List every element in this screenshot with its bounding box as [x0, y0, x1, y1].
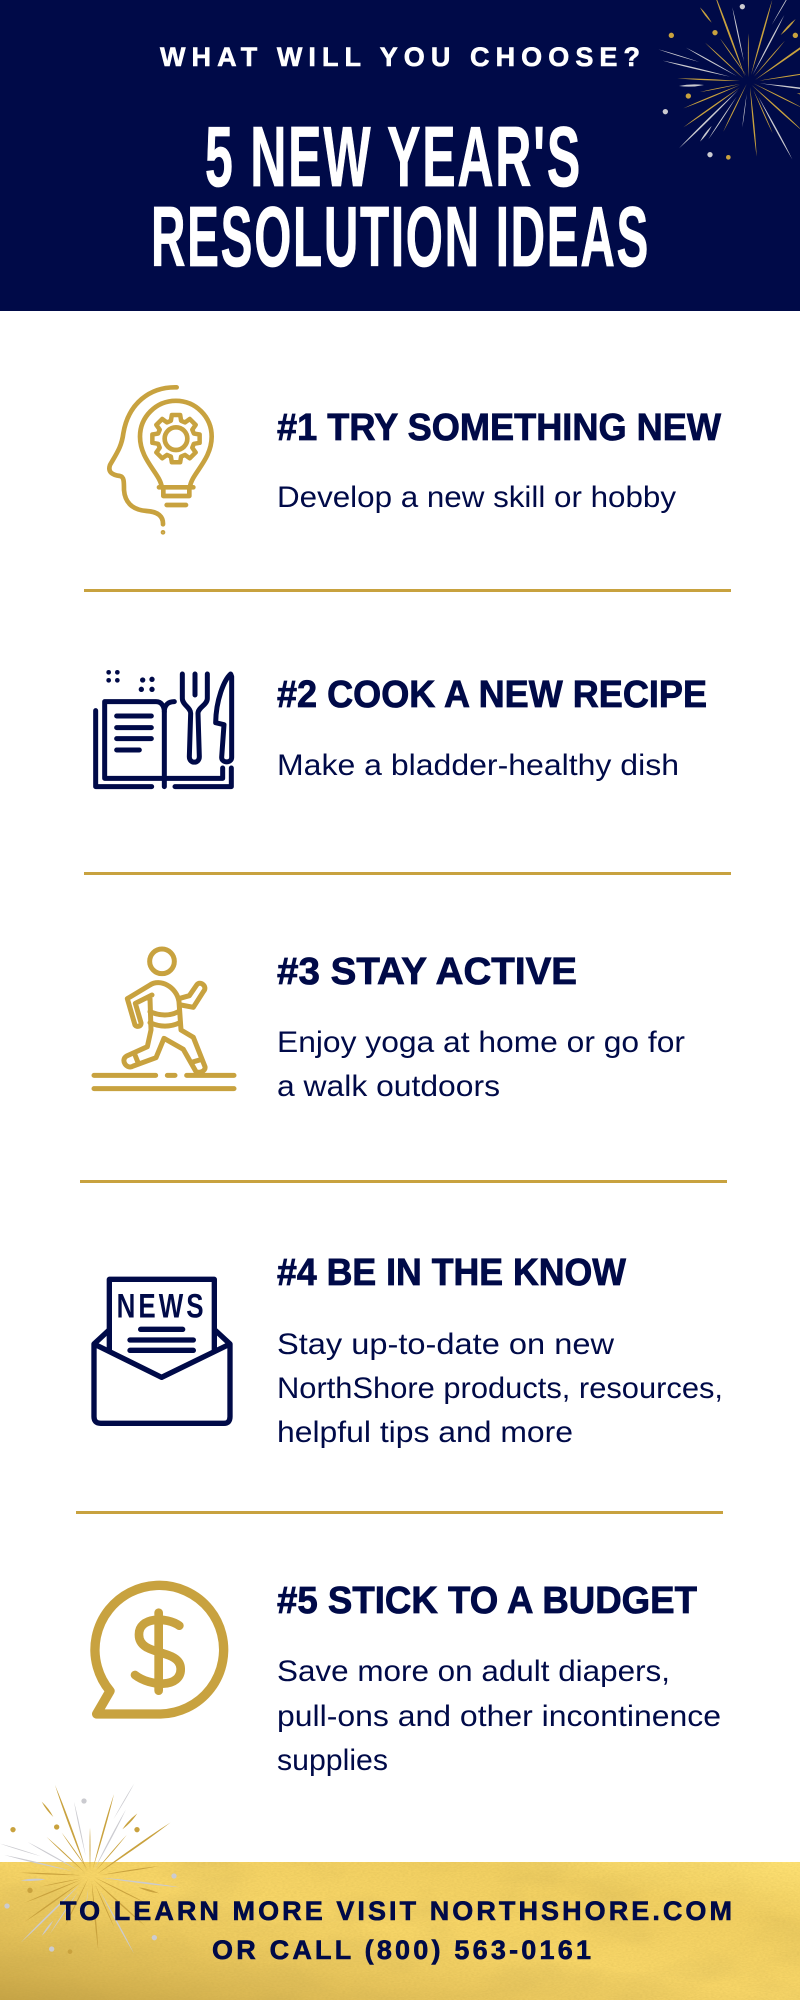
eyebrow heading: WHAT WILL YOU CHOOSE? [160, 42, 640, 72]
description: supplies [277, 1744, 388, 1777]
panel: resolution 5 [95, 1580, 721, 1777]
panel: resolution 1 [109, 387, 721, 533]
firework: bottom left [0, 1783, 180, 1954]
footer panel [0, 1783, 800, 2000]
description: Stay up-to-date on new [277, 1328, 614, 1361]
description [277, 1328, 723, 1449]
description [277, 1026, 685, 1103]
title [151, 110, 650, 285]
panel: resolution 4 [94, 1252, 723, 1449]
icon: head with light bulb gear [109, 387, 212, 533]
description: Develop a new skill or hobby [277, 481, 676, 514]
header background [0, 0, 800, 311]
icon: dollar speech bubble [95, 1585, 224, 1714]
divider 4 [76, 1511, 723, 1514]
heading: #2 COOK A NEW RECIPE [277, 674, 707, 716]
description: Save more on adult diapers, [277, 1655, 670, 1688]
panel: resolution 2 [96, 670, 707, 789]
icon: newsletter envelope [94, 1279, 230, 1423]
gold foil background [0, 1862, 800, 2000]
heading: #4 BE IN THE KNOW [277, 1252, 626, 1294]
panel: resolution 3 [94, 949, 685, 1103]
header panel [0, 0, 800, 311]
description: helpful tips and more [277, 1416, 573, 1449]
description: pull-ons and other incontinence [277, 1700, 721, 1733]
icon: recipe book with fork and knife [96, 670, 232, 789]
call to action [60, 1896, 732, 1965]
call to action: OR CALL (800) 563-0161 [212, 1935, 591, 1965]
description: Enjoy yoga at home or go for [277, 1026, 685, 1059]
description: a walk outdoors [277, 1070, 500, 1103]
divider 1 [84, 589, 731, 592]
icon: walking person [94, 949, 234, 1089]
divider 2 [84, 872, 731, 875]
description [277, 1655, 721, 1777]
call to action: TO LEARN MORE VISIT NORTHSHORE.COM [60, 1896, 732, 1926]
description: Make a bladder-healthy dish [277, 749, 679, 782]
icon: newsletter envelope: NEWS [117, 1287, 207, 1325]
heading: #1 TRY SOMETHING NEW [277, 407, 721, 449]
description: NorthShore products, resources, [277, 1372, 723, 1405]
firework: top right [658, 0, 800, 160]
heading: #5 STICK TO A BUDGET [277, 1580, 697, 1622]
divider 3 [80, 1180, 727, 1183]
heading: #3 STAY ACTIVE [277, 951, 577, 993]
